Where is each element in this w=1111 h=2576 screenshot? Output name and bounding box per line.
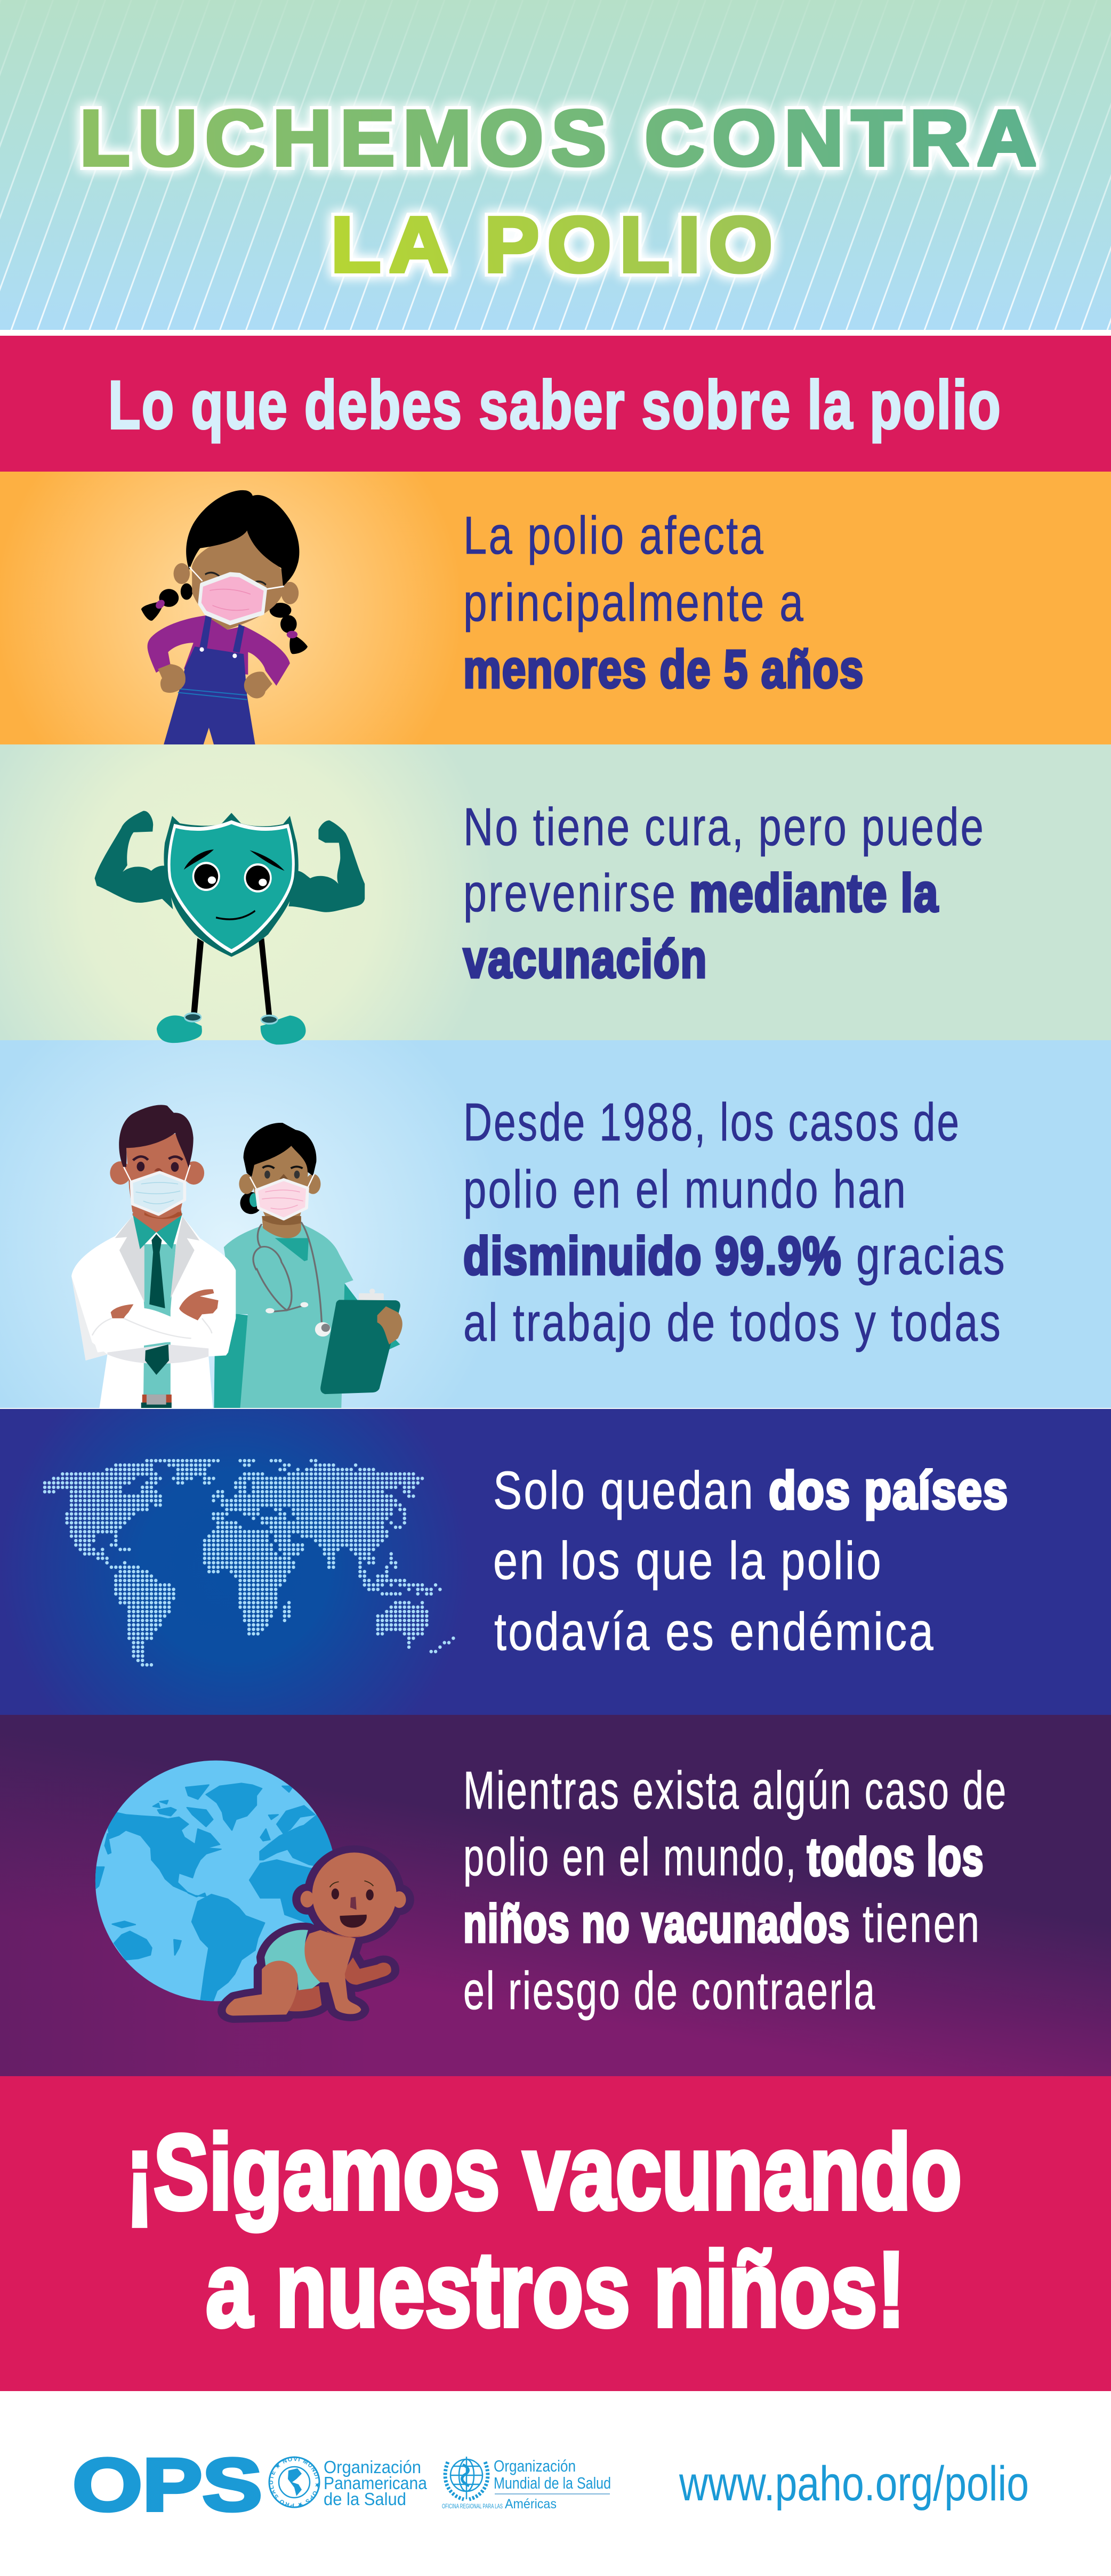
icon: muscular shield	[95, 811, 365, 1044]
text: disminuido 99.9%: gracias	[856, 1226, 1007, 1286]
text: niños no vacunados: niños no vacunados	[463, 1894, 850, 1954]
text: Organización Panamericana de la Salud	[324, 2457, 428, 2509]
title	[79, 94, 1036, 289]
text: Organización Mundial de la Salud Américas: OFICINA REGIONAL PARA LAS	[442, 2502, 503, 2510]
icon: globe	[95, 1761, 338, 2002]
text: Organización Mundial de la Salud Américas: Mundial de la Salud	[494, 2474, 611, 2492]
text: niños no vacunados	[463, 1761, 1008, 2021]
text: dos países: en los que la polio	[493, 1531, 883, 1591]
panel: menores de 5 años	[0, 472, 1111, 744]
panel: subtitle banner	[0, 336, 1111, 472]
text: disminuido 99.9%: polio en el mundo han	[463, 1160, 907, 1219]
text: Organización Panamericana de la Salud: Organización	[324, 2457, 421, 2477]
panel: call to action	[0, 2076, 1111, 2391]
text: dos países: Solo quedan	[493, 1461, 755, 1520]
text: vacunación	[463, 797, 985, 989]
text: disminuido 99.9%	[463, 1092, 1007, 1352]
text: menores de 5 años	[463, 506, 864, 699]
icon: nurse	[214, 1123, 402, 1408]
panel: footer logos	[73, 2443, 1029, 2526]
text: Organización Mundial de la Salud Américas: Organización	[494, 2457, 576, 2475]
title: LUCHEMOS CONTRA	[79, 94, 1036, 182]
text: vacunación: prevenirse	[463, 863, 677, 923]
text: dos países	[493, 1461, 1009, 1662]
icon: girl with mask	[141, 490, 308, 744]
panel: disminuido 99.9%	[0, 1040, 1111, 1408]
icon: doctor	[71, 1105, 236, 1408]
text: dos países: dos países	[769, 1461, 1009, 1520]
text: Organización Mundial de la Salud Américas: Américas	[505, 2497, 557, 2512]
text: niños no vacunados: todos los	[807, 1827, 984, 1887]
heading: sigamos vacunando: a nuestros niños!	[206, 2230, 905, 2349]
panel: dos países	[0, 1409, 1111, 1715]
logo: OPS wordmark: OPS	[73, 2443, 262, 2526]
icon: globe and baby	[95, 1761, 406, 2016]
text: Organización Panamericana de la Salud: Panamericana	[324, 2473, 428, 2493]
text: dos países: todavía es endémica	[494, 1602, 935, 1662]
text: disminuido 99.9%: disminuido 99.9%	[463, 1226, 842, 1286]
text: menores de 5 años: principalmente a	[463, 573, 805, 633]
icon: health workers	[71, 1105, 402, 1408]
icon: baby	[226, 1852, 406, 2016]
text: menores de 5 años: La polio afecta	[463, 506, 765, 565]
title: LA POLIO	[331, 201, 772, 289]
panel: niños no vacunados	[0, 1715, 1111, 2076]
logo: PAHO seal: PRO SALUTE ★ NOVI MUNDI ★ OPS ★	[270, 2458, 320, 2507]
text: niños no vacunados: tienen	[863, 1894, 981, 1954]
panel: vacunación	[0, 744, 1111, 1044]
text: vacunación: mediante la	[689, 863, 939, 923]
text: Organización Mundial de la Salud Américas	[442, 2457, 611, 2512]
text: website url: www.paho.org/polio	[679, 2457, 1029, 2511]
text: vacunación: vacunación	[463, 929, 707, 989]
text: niños no vacunados: el riesgo de contraerla	[463, 1961, 876, 2021]
icon: dotted world map	[45, 1461, 454, 1665]
panel: title header	[0, 0, 1111, 330]
heading: sigamos vacunando	[126, 2113, 962, 2349]
logo: WHO emblem	[445, 2457, 488, 2499]
text: niños no vacunados: polio en el mundo,	[463, 1827, 798, 1887]
text: disminuido 99.9%: Desde 1988, los casos de	[463, 1092, 961, 1152]
text: menores de 5 años: menores de 5 años	[463, 639, 864, 699]
text: Organización Panamericana de la Salud: de la Salud	[324, 2489, 406, 2509]
